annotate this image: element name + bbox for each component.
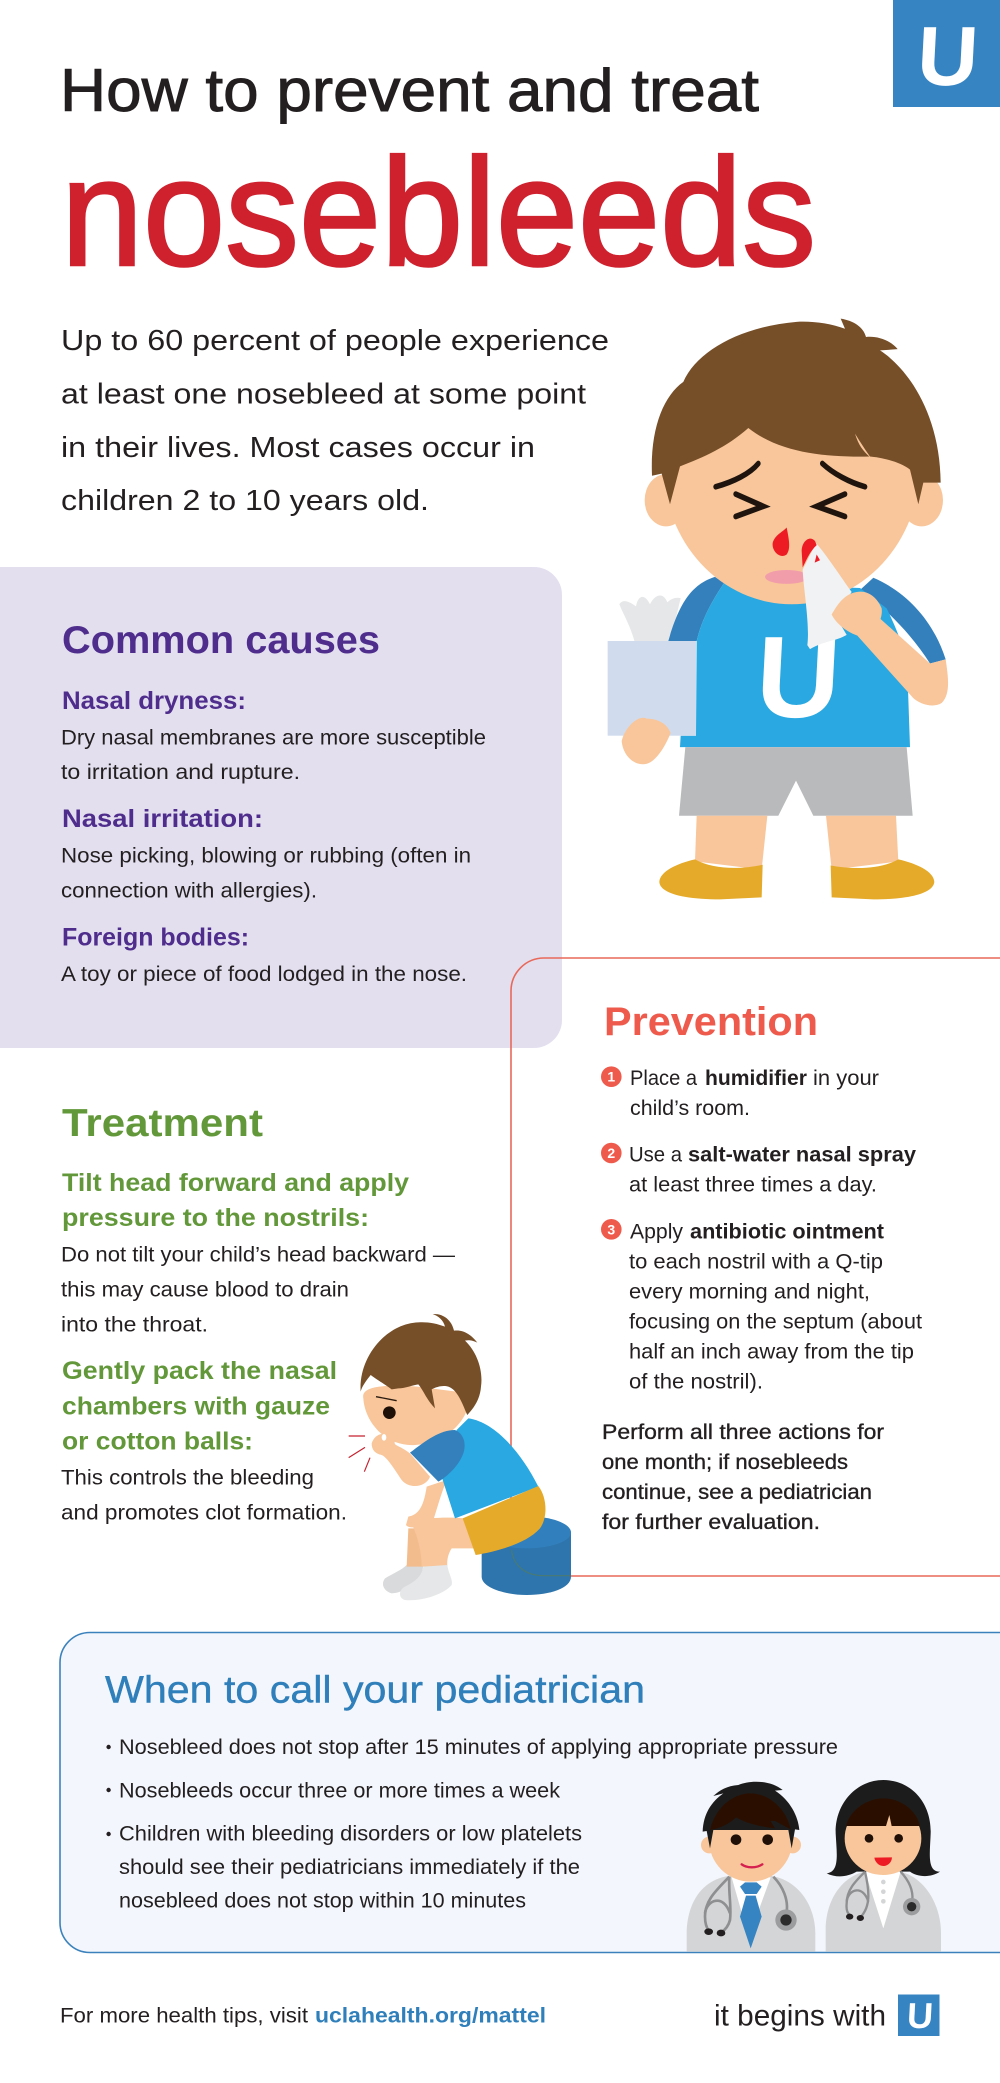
treatment step: pack nasal chambers: or cotton balls: [62, 1428, 253, 1456]
prevention step 1 [601, 1066, 879, 1120]
cause: nasal irritation: Nasal irritation: [62, 805, 263, 833]
prevention step 3: half an inch away from the tip [629, 1340, 914, 1364]
cause: nasal irritation: Nose picking, blowing or rubbing (often in [61, 844, 471, 868]
prevention closing note: continue, see a pediatrician [602, 1481, 872, 1504]
bullet list: Nosebleed does not stop after 15 minutes of applying appropriate pressure [119, 1736, 838, 1759]
treatment step: tilt head: this may cause blood to drain [61, 1278, 349, 1302]
footer: it begins with U logo [714, 1994, 940, 2036]
intro text: Up to 60 percent of people experience [61, 325, 609, 357]
treatment step: pack nasal chambers [61, 1357, 347, 1524]
prevention step 3: every morning and night, [629, 1280, 870, 1304]
prevention closing note: one month; if nosebleeds [602, 1451, 848, 1474]
bullet list: should see their pediatricians immediately if the [119, 1856, 580, 1879]
cause: foreign bodies: Foreign bodies: [62, 924, 249, 952]
treatment step: tilt head: Do not tilt your child’s head backward — [61, 1244, 455, 1266]
prevention step 1: Place a [630, 1067, 697, 1090]
prevention step 3: of the nostril). [629, 1370, 763, 1394]
footer: it begins with U logo: U [906, 1995, 934, 2036]
cause: nasal irritation [61, 805, 471, 902]
bullet list: nosebleed does not stop within 10 minutes [119, 1890, 526, 1912]
bullet list [106, 1736, 838, 1912]
prevention step 1: 1 [607, 1069, 615, 1085]
logo: top right U: U [915, 9, 981, 103]
prevention closing note: for further evaluation. [602, 1511, 820, 1534]
panel: common causes [0, 567, 562, 1048]
tissues in box [619, 596, 681, 643]
cause: nasal dryness: to irritation and rupture. [61, 761, 300, 784]
prevention step 3: focusing on the septum (about [629, 1310, 922, 1334]
prevention step 1: humidifier [705, 1067, 807, 1090]
heading: prevention: Prevention [604, 1000, 818, 1044]
bullet list: Nosebleeds occur three or more times a week [119, 1780, 561, 1802]
heading: treatment: Treatment [62, 1102, 263, 1145]
cause: nasal dryness [61, 687, 486, 784]
prevention step 1: in your [813, 1067, 879, 1090]
prevention step 2: Use a [629, 1144, 682, 1166]
prevention step 3 [601, 1219, 922, 1394]
footer: health tips link: For more health tips, visit [60, 2004, 308, 2028]
illustration: seated boy pinching nose [349, 1314, 571, 1600]
footer: health tips link [60, 2004, 546, 2028]
treatment step: pack nasal chambers: This controls the bleeding [61, 1466, 314, 1490]
footer: health tips link: uclahealth.org/mattel [315, 2004, 546, 2028]
treatment step: tilt head: pressure to the nostrils: [62, 1204, 369, 1232]
cause: nasal dryness: Nasal dryness: [62, 687, 246, 715]
title: How to prevent and treat [60, 57, 759, 124]
logo: top right U [893, 0, 1000, 107]
prevention closing note: Perform all three actions for [602, 1421, 884, 1444]
illustration: male doctor [687, 1782, 815, 1952]
intro text: in their lives. Most cases occur in [61, 432, 535, 464]
prevention step 3: antibiotic ointment [690, 1220, 884, 1244]
panel: prevention outline [511, 958, 1000, 1576]
intro text [61, 325, 609, 517]
cause: nasal irritation: connection with allergies). [61, 880, 317, 902]
prevention step 2: salt-water nasal spray [688, 1144, 916, 1166]
prevention step 3: Apply [630, 1220, 684, 1244]
panel: when to call your pediatrician [60, 1632, 1000, 1952]
prevention step 2 [601, 1143, 916, 1196]
prevention step 2: at least three times a day. [629, 1174, 877, 1196]
prevention step 1: child’s room. [630, 1097, 750, 1120]
heading: when to call: When to call your pediatrician [105, 1670, 645, 1712]
prevention step 3: to each nostril with a Q-tip [629, 1250, 883, 1274]
treatment step: pack nasal chambers: Gently pack the nasal [62, 1357, 337, 1385]
title [60, 57, 816, 298]
bullet list: Children with bleeding disorders or low platelets [119, 1822, 582, 1846]
cause: nasal dryness: Dry nasal membranes are more susceptible [61, 726, 486, 750]
treatment step: tilt head: into the throat. [61, 1314, 208, 1336]
cause: foreign bodies [61, 924, 467, 986]
prevention closing note [602, 1421, 884, 1534]
footer: it begins with U logo: it begins with [714, 2000, 886, 2032]
illustration: female doctor [826, 1780, 941, 1952]
illustration: boy with nosebleed: U [753, 612, 844, 742]
prevention step 2: 2 [607, 1145, 615, 1161]
heading: common causes: Common causes [62, 619, 380, 662]
treatment step: pack nasal chambers: chambers with gauze [62, 1392, 330, 1420]
intro text: children 2 to 10 years old. [61, 485, 429, 517]
illustration: boy with nosebleed [608, 319, 948, 899]
treatment step: tilt head: Tilt head forward and apply [62, 1169, 409, 1197]
prevention step 3: 3 [607, 1221, 615, 1237]
title: nosebleeds [61, 127, 816, 298]
cause: foreign bodies: A toy or piece of food lodged in the nose. [61, 963, 467, 986]
treatment step: tilt head [61, 1169, 455, 1336]
treatment step: pack nasal chambers: and promotes clot formation. [61, 1502, 347, 1524]
intro text: at least one nosebleed at some point [61, 378, 586, 410]
